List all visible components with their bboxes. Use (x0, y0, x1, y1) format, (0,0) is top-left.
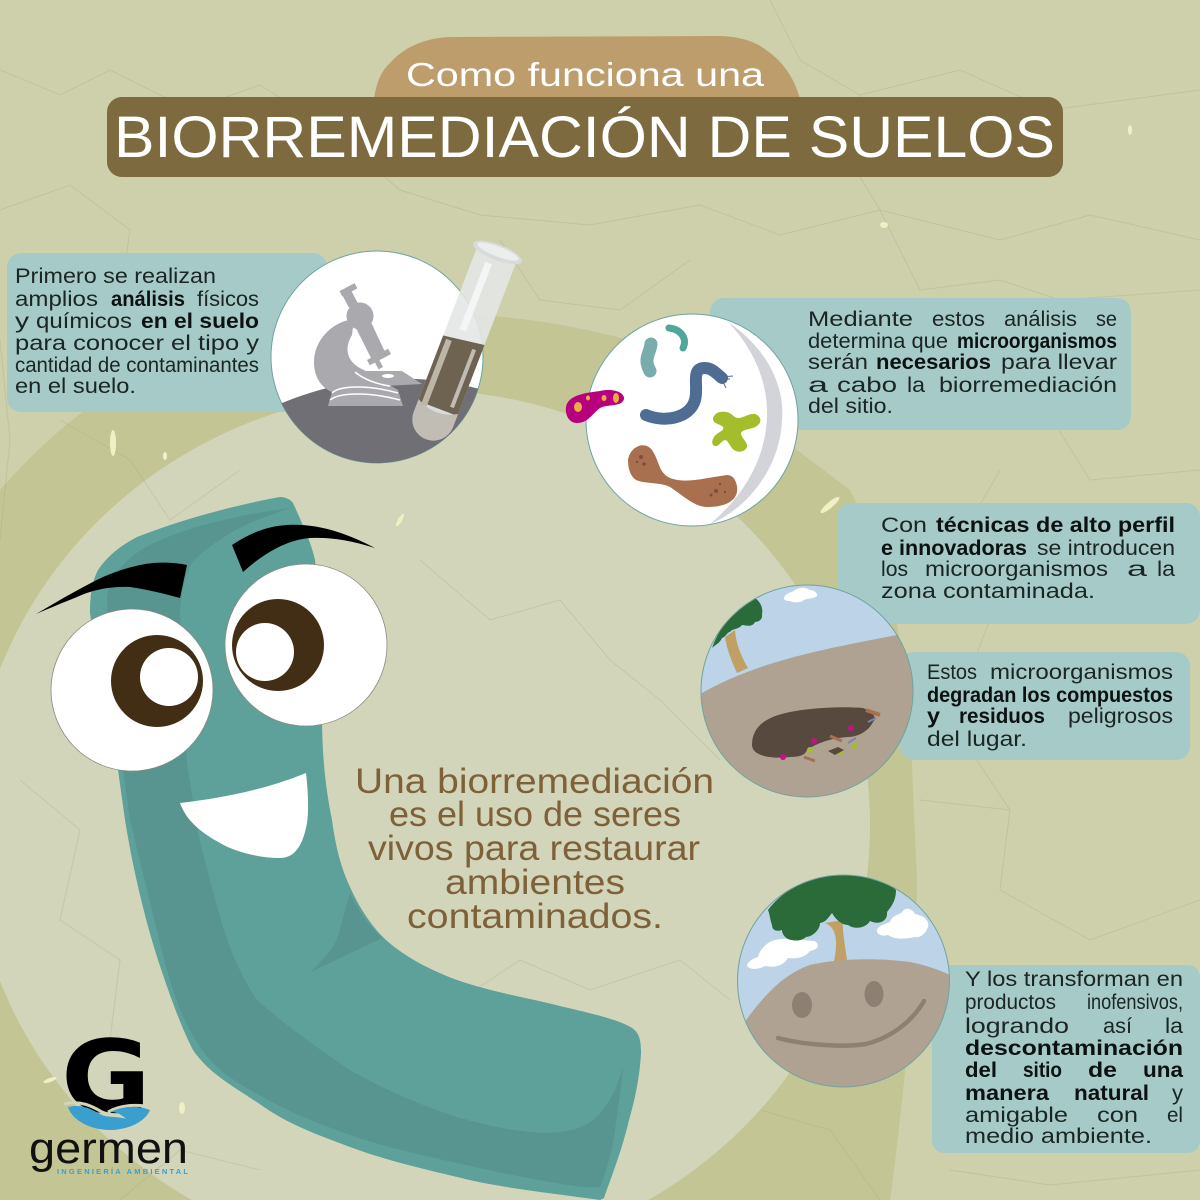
tree (712, 598, 762, 673)
crown (768, 874, 896, 941)
step 2 text: la (907, 373, 925, 397)
step 1 text: para conocer el tipo y (15, 331, 259, 355)
definition text: Una biorremediación (355, 762, 714, 801)
microbe: teal small (669, 328, 685, 348)
step 5 text: productos (965, 990, 1056, 1014)
step 2 text: microorganismos (957, 329, 1117, 353)
definition text: contaminados. (407, 897, 663, 936)
step 2 text: biorremediación (939, 373, 1117, 397)
icon: microscope in circle (270, 251, 490, 470)
body (90, 497, 641, 1200)
step 2 text: determina que (808, 329, 948, 353)
icon: test tube (402, 236, 525, 448)
step 4 text: peligrosos (1068, 704, 1173, 728)
step 5 text: inofensivos, (1087, 990, 1183, 1014)
contaminated blob (752, 707, 875, 758)
trunk (825, 920, 847, 961)
step 1 text (15, 264, 259, 398)
ground face (746, 959, 949, 1086)
microbe: blue worm (646, 368, 733, 419)
cloud (784, 588, 817, 602)
step 5 text: Y los transforman en (965, 967, 1183, 991)
step 1 text: análisis (111, 287, 185, 311)
step 2 text: Mediante (808, 307, 913, 331)
step 5 text: y (1172, 1081, 1183, 1105)
step 3 text: técnicas de alto perfil (936, 513, 1175, 537)
character: bacterium mascot (36, 497, 641, 1200)
step 4 text: microorganismos (990, 660, 1173, 684)
step 2 text: necesarios (876, 350, 991, 374)
step 3 text: los (881, 557, 908, 581)
step 2 background (710, 298, 1131, 430)
panel: step 1 analysis (7, 236, 525, 470)
title (107, 36, 1063, 177)
microbe: magenta (566, 390, 624, 423)
step 5 text: de (1088, 1058, 1117, 1082)
definition text: es el uso de seres (389, 795, 681, 834)
step 4 text: Estos (927, 660, 977, 684)
right eyebrow (232, 525, 375, 572)
step 4 background (900, 652, 1190, 760)
step 5 text: sitio (1023, 1058, 1062, 1082)
panel: step 5 transformation (932, 965, 1200, 1153)
logo: germen (29, 1018, 188, 1176)
title box (107, 97, 1063, 177)
step 3 text: la (1157, 557, 1175, 581)
step 3 text: zona contaminada. (881, 579, 1095, 603)
logo wordmark: germen (29, 1124, 188, 1173)
icon: petri dish (566, 314, 798, 526)
eyes (792, 992, 812, 1018)
step 5 background (932, 965, 1200, 1153)
icon: contaminated soil scene (690, 585, 920, 800)
step 4 text: del lugar. (927, 727, 1027, 751)
step 2 text (808, 307, 1117, 418)
step 2 text: a (808, 373, 828, 397)
microbe: teal long (647, 344, 651, 371)
step 1 text: físicos (197, 287, 259, 311)
step 2 text: estos (932, 307, 985, 331)
step 2 text: serán (808, 350, 868, 374)
panel: step 4 degradation (900, 652, 1190, 760)
panel: step 2 microorganisms (566, 298, 1131, 526)
microbes on blob edge (780, 710, 880, 761)
step 2 text: se (1096, 307, 1117, 331)
step 4 text: y (927, 704, 940, 728)
title main line: BIORREMEDIACIÓN DE SUELOS (114, 105, 1055, 170)
step 3 text (881, 513, 1175, 603)
microbe: green blob (712, 412, 760, 452)
title small line: Como funciona una (406, 56, 765, 93)
step 5 text: natural (1074, 1081, 1149, 1105)
microbe: brown (628, 445, 737, 507)
step 3 text: microorganismos (925, 557, 1108, 581)
step 1 background (7, 253, 327, 412)
step 1 text: en el suelo. (15, 374, 136, 398)
step 5 text: del (965, 1058, 997, 1082)
step 5 text: descontaminación (965, 1036, 1183, 1060)
step 3 text: e innovadoras (881, 536, 1027, 560)
step 4 text: residuos (959, 704, 1045, 728)
icon: happy soil scene (737, 874, 950, 1088)
step 5 text: con (1097, 1103, 1138, 1127)
step 5 text: una (1143, 1058, 1184, 1082)
step 2 text: para llevar (1001, 350, 1117, 374)
step 1 text: cantidad de contaminantes (15, 353, 259, 377)
clouds (747, 909, 928, 969)
step 3 text: se introducen (1037, 536, 1175, 560)
step 2 text: análisis (1004, 307, 1077, 331)
panel: step 3 techniques (837, 503, 1200, 624)
definition text (355, 762, 714, 936)
step 3 background (837, 503, 1200, 624)
step 1 text: Primero se realizan (15, 264, 216, 288)
step 3 text: Con (881, 513, 927, 537)
ground (702, 635, 912, 796)
step 5 text (965, 967, 1184, 1148)
logo tagline: INGENIERÍA AMBIENTAL (57, 1167, 188, 1176)
step 5 text: la (1165, 1014, 1183, 1038)
step 3 text: a (1127, 557, 1147, 581)
step 1 text: en el suelo (141, 309, 259, 333)
left eye (51, 609, 213, 771)
logo hand wave (64, 1103, 154, 1130)
step 5 text: manera (965, 1081, 1050, 1105)
smile (778, 1001, 924, 1046)
body shading strip (107, 508, 623, 1187)
step 5 text: amigable (965, 1103, 1068, 1127)
mouth (180, 773, 308, 858)
definition text: vivos para restaurar (368, 829, 700, 868)
right eye (225, 564, 387, 726)
step 1 text: químicos (36, 309, 132, 333)
logo letter: G (61, 1018, 151, 1136)
step 5 text: el (1167, 1103, 1183, 1127)
body shading fold (311, 893, 382, 972)
definition text: ambientes (445, 863, 625, 902)
step 5 text: medio ambiente. (965, 1124, 1152, 1148)
step 2 text: del sitio. (808, 394, 893, 418)
step 1 text: y (15, 309, 29, 333)
step 5 text: logrando (965, 1014, 1069, 1038)
step 2 text: cabo (837, 373, 897, 397)
step 4 text: degradan los compuestos (927, 683, 1173, 707)
left eyebrow (36, 563, 187, 614)
step 5 text: así (1103, 1014, 1132, 1038)
title tab (374, 36, 800, 99)
step 1 text: amplios (15, 287, 98, 311)
step 4 text (927, 660, 1173, 751)
